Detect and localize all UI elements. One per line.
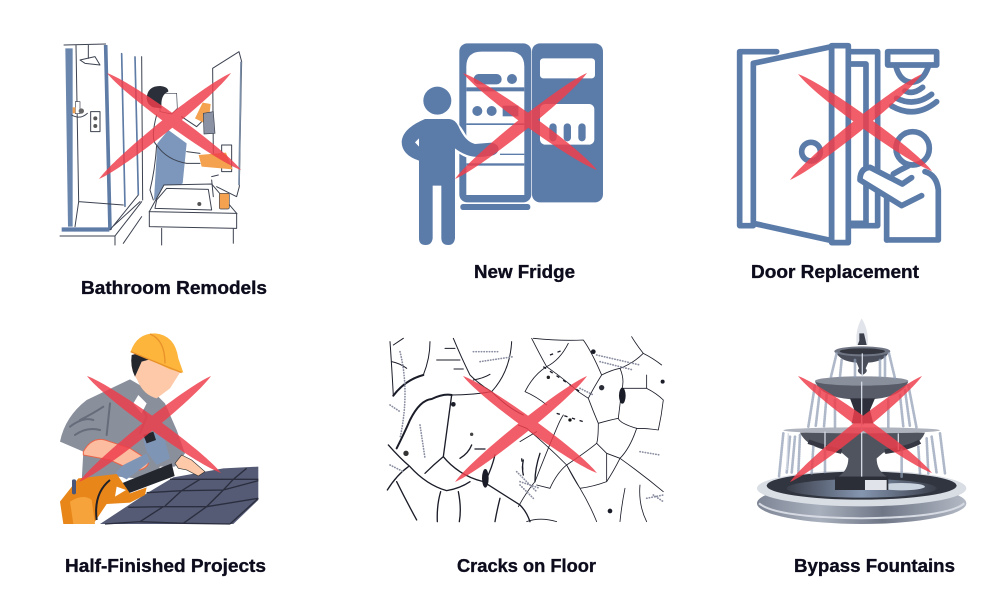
panel: door replacement [740,46,938,282]
panel: bathroom remodels [60,44,267,298]
heading: Bathroom Remodels: Bathroom Remodels [81,278,267,298]
illustration: three-tier fountain [757,318,966,524]
icon: person opening a fridge [402,43,603,245]
red cross [790,74,932,180]
heading: Half-Finished Projects: Half-Finished Projects [65,556,266,576]
illustration: roofer with nail gun [60,333,258,524]
icon: door with sensor and person [740,46,938,243]
heading: New Fridge: New Fridge [474,262,575,282]
panel: new fridge [402,43,603,282]
panel: half-finished projects [60,333,266,576]
panel: bypass fountains [757,318,966,576]
heading: Door Replacement: Door Replacement [751,262,919,282]
red cross [790,376,932,482]
illustration: cracked floor texture [387,337,665,522]
panel: cracks on floor [387,337,665,576]
red cross [455,376,597,482]
heading: Bypass Fountains: Bypass Fountains [794,556,955,576]
heading: Cracks on Floor: Cracks on Floor [457,556,596,576]
red cross [79,376,221,482]
red cross [99,73,241,179]
illustration: person cleaning a bathroom [60,44,242,245]
red cross [455,73,597,179]
